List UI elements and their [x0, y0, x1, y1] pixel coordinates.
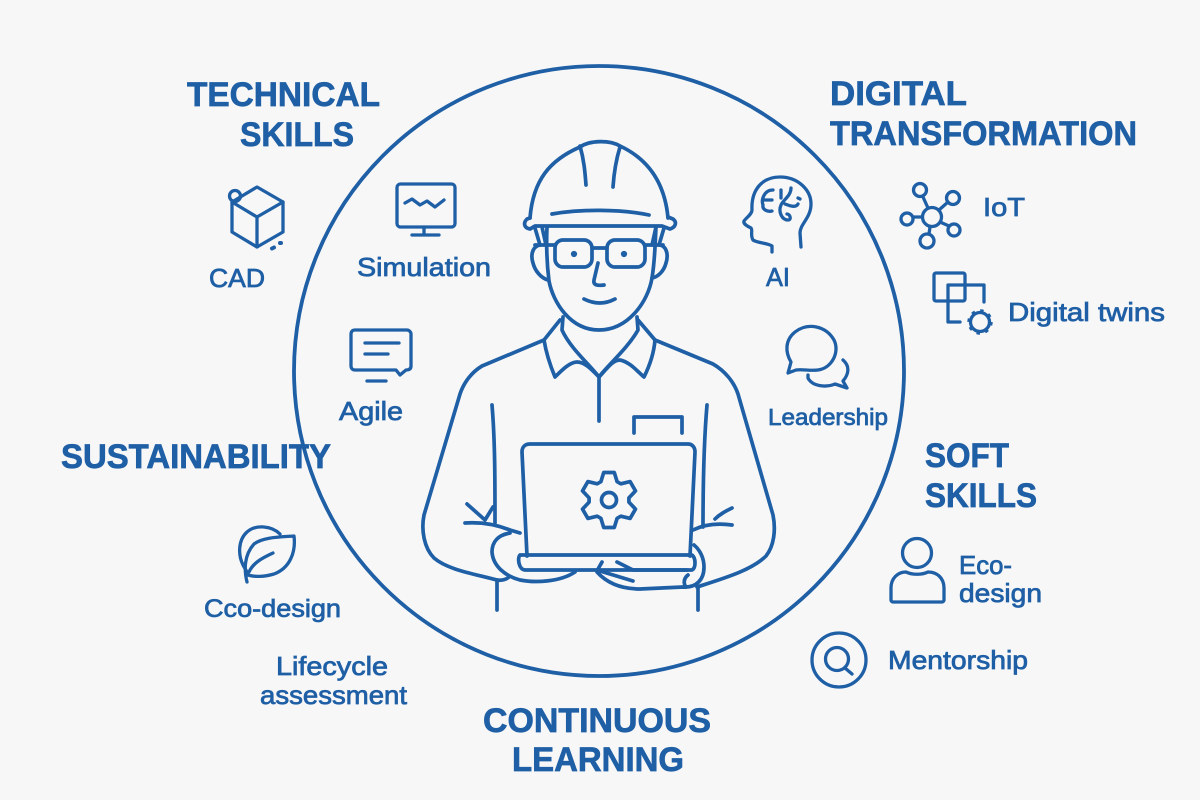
- icon: person: [891, 538, 944, 602]
- heading: continuous learning: CONTINUOUS: [483, 702, 711, 740]
- engineer figure: [423, 142, 774, 610]
- heading: sustainability: SUSTAINABILITY: [61, 438, 331, 476]
- heading: soft skills: SOFT: [925, 437, 1009, 475]
- label: Agile: Agile: [339, 396, 403, 426]
- icon: AI head: [744, 177, 811, 252]
- icon: leaf: [240, 527, 294, 582]
- label: Simulation: Simulation: [357, 252, 491, 282]
- icon: digital twins: [934, 273, 992, 334]
- label: AI: AI: [766, 262, 790, 292]
- heading: soft skills: [925, 437, 1037, 515]
- hands: [465, 504, 732, 589]
- icon: gear on laptop: [582, 472, 636, 528]
- label: CAD: CAD: [209, 263, 265, 293]
- label: IoT: IoT: [983, 192, 1025, 222]
- laptop: [519, 444, 695, 570]
- label: Eco-design: Eco-: [959, 550, 1012, 580]
- central circle: [294, 66, 904, 676]
- label: Digital twins: Digital twins: [1008, 297, 1165, 327]
- heading: soft skills: SKILLS: [925, 477, 1037, 515]
- heading: technical skills: TECHNICAL: [187, 76, 380, 114]
- heading: technical skills: [187, 76, 380, 154]
- face: [532, 227, 667, 330]
- hard hat: [525, 142, 675, 229]
- label: Lifecycle assessment: Lifecycle: [276, 651, 388, 681]
- label: Lifecycle assessment: [260, 651, 408, 710]
- icon: CAD cube: [230, 187, 283, 248]
- icon: IoT network: [901, 184, 960, 248]
- icon: mentorship magnifier: [812, 633, 866, 687]
- heading: digital transformation: DIGITAL: [830, 75, 967, 113]
- label: Leadership: Leadership: [768, 404, 888, 430]
- heading: continuous learning: LEARNING: [512, 741, 684, 779]
- label: Mentorship: Mentorship: [888, 645, 1028, 675]
- glasses: [535, 240, 663, 267]
- heading: technical skills: SKILLS: [240, 116, 354, 154]
- skills icons: [230, 177, 992, 687]
- torso and arms: [423, 340, 774, 610]
- icon: agile chat: [351, 330, 411, 381]
- label: Cco-design: Cco-design: [204, 595, 341, 623]
- icon: simulation monitor: [397, 184, 455, 235]
- heading: digital transformation: [830, 75, 1137, 153]
- heading: digital transformation: TRANSFORMATION: [830, 115, 1137, 153]
- heading: continuous learning: [483, 702, 711, 779]
- label: Lifecycle assessment: assessment: [260, 680, 408, 710]
- label: Eco-design: [959, 550, 1042, 608]
- icon: leadership speech bubbles: [787, 326, 848, 388]
- label: Eco-design: design: [959, 578, 1042, 608]
- collar: [544, 317, 655, 421]
